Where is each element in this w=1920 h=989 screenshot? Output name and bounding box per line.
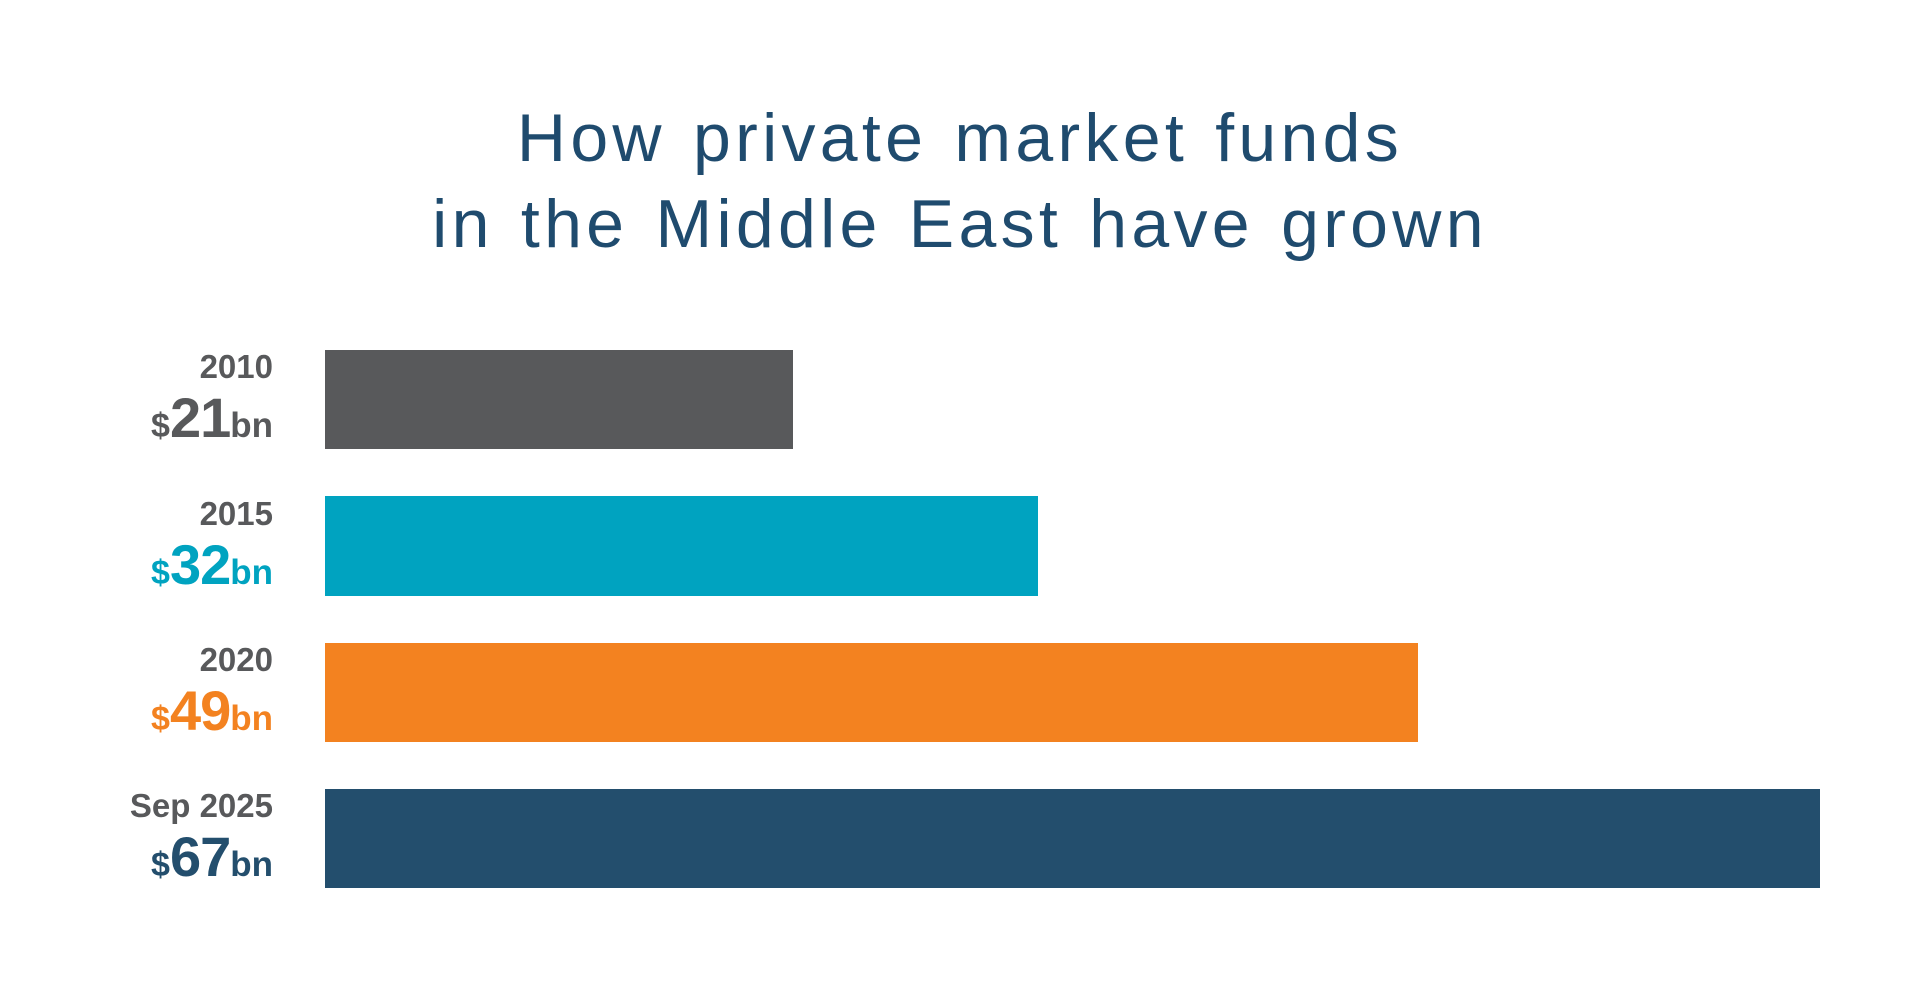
- bar: Sep 2025: [325, 789, 1820, 888]
- bar: 2010: [325, 350, 793, 449]
- label: Sep 2025: $67bn: [151, 825, 273, 888]
- label: 2020: $49bn: [151, 679, 273, 742]
- title: in the Middle East have grown: [432, 186, 1488, 262]
- label: 2015: 2015: [200, 495, 273, 532]
- label: 2020: 2020: [200, 641, 273, 678]
- bar: 2015: [325, 496, 1038, 596]
- label: 2020: [151, 641, 273, 742]
- label: 2015: $32bn: [151, 533, 273, 596]
- label: Sep 2025: Sep 2025: [130, 787, 273, 824]
- label: 2010: 2010: [200, 348, 273, 385]
- bar: 2020: [325, 643, 1418, 742]
- bar chart: [130, 348, 1820, 888]
- label: 2010: $21bn: [151, 386, 273, 449]
- title: [432, 100, 1488, 262]
- title: How private market funds: [517, 100, 1403, 176]
- label: Sep 2025: [130, 787, 273, 888]
- label: 2010: [151, 348, 273, 449]
- label: 2015: [151, 495, 273, 596]
